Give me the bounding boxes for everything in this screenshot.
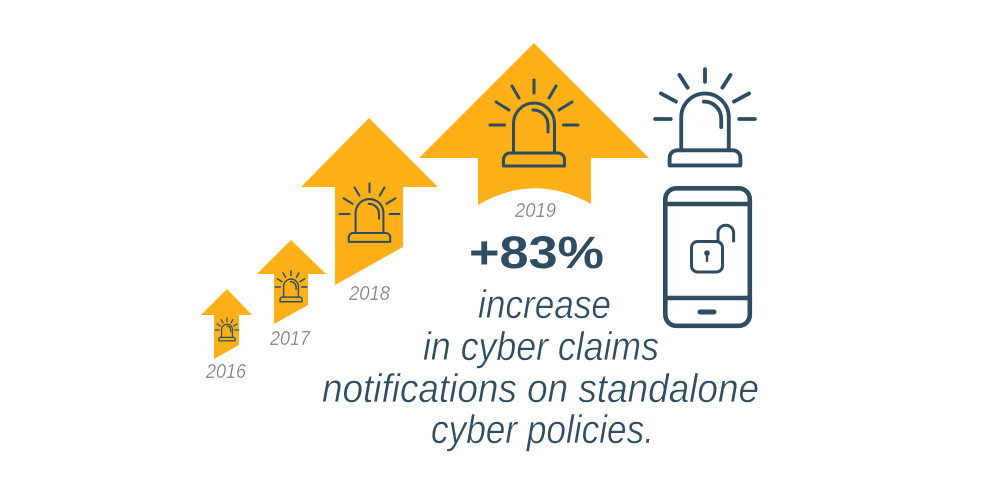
arrow 2016 (201, 289, 252, 359)
text block: description: cyber policies. (431, 408, 654, 452)
arrow 2018 (301, 118, 438, 285)
text block: description (322, 283, 759, 452)
text block: description: increase (478, 283, 611, 327)
year label 2017: 2017 (269, 327, 311, 350)
icon: open padlock (692, 225, 734, 272)
year label 2016: 2016 (205, 360, 247, 383)
text block: description: notifications on standalone (322, 367, 759, 411)
icon: alarm 2016 (215, 318, 239, 341)
year label 2018: 2018 (348, 282, 391, 305)
icon: alarm 2019 (490, 80, 578, 166)
arrow 2017 (257, 240, 326, 324)
icon: large alarm (655, 69, 755, 165)
headline: +83%: +83% (469, 227, 604, 278)
icon: alarm 2017 (275, 271, 307, 302)
arrow 2019 (419, 43, 649, 205)
icon: smartphone with open padlock (665, 188, 750, 326)
icon: alarm 2018 (340, 183, 399, 242)
year label 2019: 2019 (514, 199, 556, 222)
text block: description: in cyber claims (423, 325, 659, 369)
